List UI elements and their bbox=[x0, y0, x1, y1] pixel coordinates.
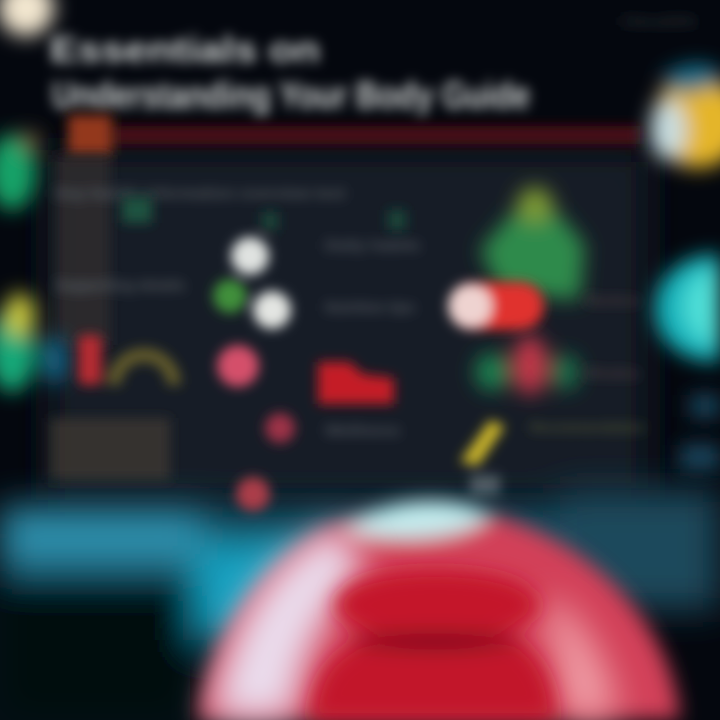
chart: red bars bbox=[318, 362, 394, 404]
gauge icon bbox=[78, 335, 174, 385]
icon: red and green cluster bbox=[475, 335, 580, 395]
icon: right teal orb bbox=[655, 254, 720, 362]
text block: center column labels: Nutrition tips bbox=[325, 299, 415, 315]
illustration: large red dome bbox=[198, 501, 680, 720]
text block: right column labels: Recommendation bbox=[530, 419, 645, 435]
title bbox=[50, 29, 530, 117]
text block: right column labels: Notes bbox=[585, 292, 640, 308]
icon: green figure bbox=[480, 187, 585, 300]
text block: right edge lines bbox=[680, 395, 720, 469]
glow: upper-left light bbox=[0, 0, 54, 36]
icon: center white and green nodes bbox=[122, 197, 406, 511]
red title divider bbox=[68, 115, 640, 155]
panel: left column text: Key health information overview text bbox=[55, 185, 345, 201]
text block: center column labels: Daily habits bbox=[325, 237, 420, 253]
panel: left column text bbox=[50, 155, 345, 480]
icon: yellow pencil bbox=[460, 420, 505, 495]
text block: right column labels: Risks bbox=[585, 365, 640, 381]
title: Understanding Your Body Guide bbox=[52, 75, 530, 117]
panel: bottom water band bbox=[0, 490, 720, 720]
icon: left edge green and yellow marks bbox=[0, 131, 68, 392]
panel: left column text: Supporting details bbox=[55, 277, 185, 293]
text: top-right caption: Health bbox=[622, 13, 697, 29]
toggle: red and white pill bbox=[448, 282, 544, 330]
title: Essentials on bbox=[50, 29, 320, 70]
text block: center column labels: Wellness bbox=[325, 422, 400, 438]
text block: center column labels bbox=[325, 237, 420, 438]
icon: top-right sphere bbox=[650, 64, 720, 168]
text block: right column labels bbox=[530, 292, 645, 435]
